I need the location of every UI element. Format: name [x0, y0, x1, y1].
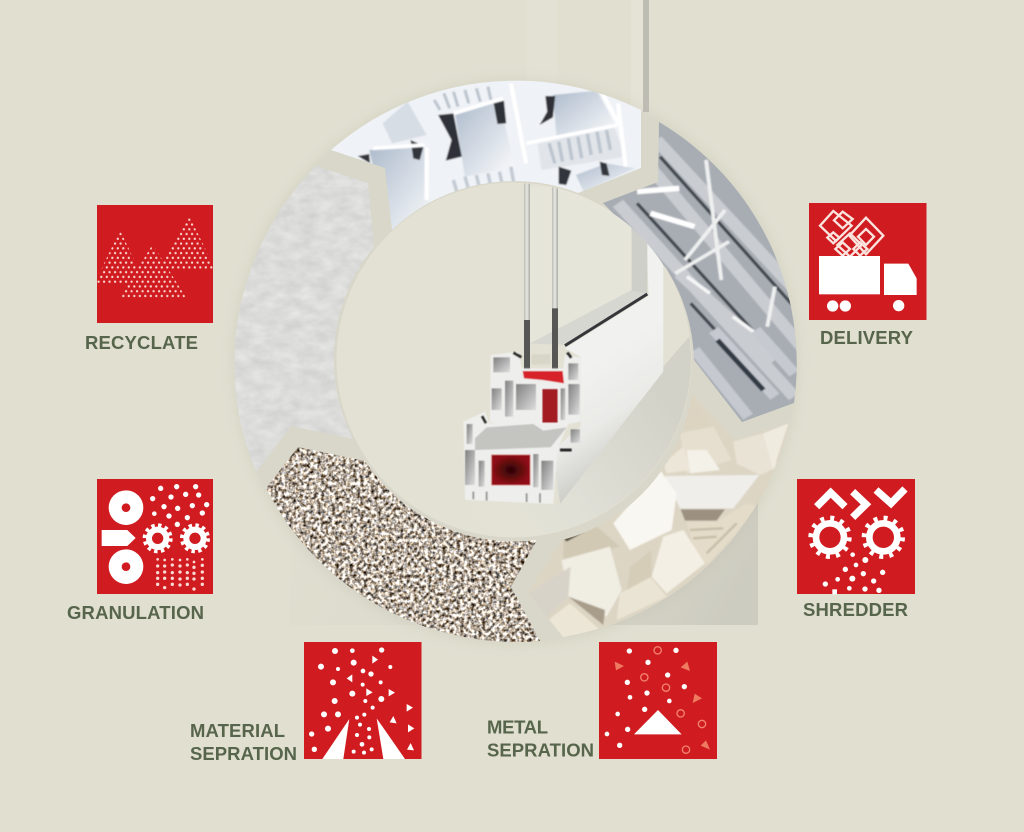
glazing pane — [613, 214, 632, 232]
ring segment: aluminium bundle — [603, 122, 797, 422]
floor shadow — [599, 336, 691, 494]
label: recyclate: RECYCLATE — [85, 332, 198, 353]
label: granulation: GRANULATION — [67, 602, 204, 623]
ring segment: white powder recyclate — [234, 166, 374, 472]
ring shading — [234, 81, 796, 643]
label: material separation: SEPRATION — [190, 743, 297, 764]
ring segment: window profiles — [331, 80, 641, 230]
label: material separation: MATERIAL — [190, 720, 285, 741]
light strip above ring — [527, 0, 649, 112]
label: delivery: DELIVERY — [820, 327, 914, 348]
profile front — [463, 352, 581, 504]
icon: material separation — [304, 642, 422, 759]
label: metal separation: METAL — [487, 716, 548, 738]
icon: metal separation — [599, 642, 717, 759]
label: metal separation: SEPRATION — [487, 740, 594, 760]
glass panes — [524, 180, 530, 320]
icon: granulation — [97, 479, 213, 594]
icon: delivery — [809, 203, 926, 320]
frame side — [553, 227, 663, 504]
ring segment: granulate — [266, 447, 540, 642]
ring segment: shredded profile — [549, 397, 788, 637]
label: metal separation — [487, 716, 594, 760]
frame rebate — [632, 227, 647, 294]
glazing rebate band — [530, 290, 647, 345]
label: shredder: SHREDDER — [803, 599, 908, 620]
icon: recyclate — [97, 205, 214, 323]
central window profile — [463, 183, 691, 504]
icon: shredder — [797, 479, 915, 594]
label: material separation — [190, 720, 297, 764]
